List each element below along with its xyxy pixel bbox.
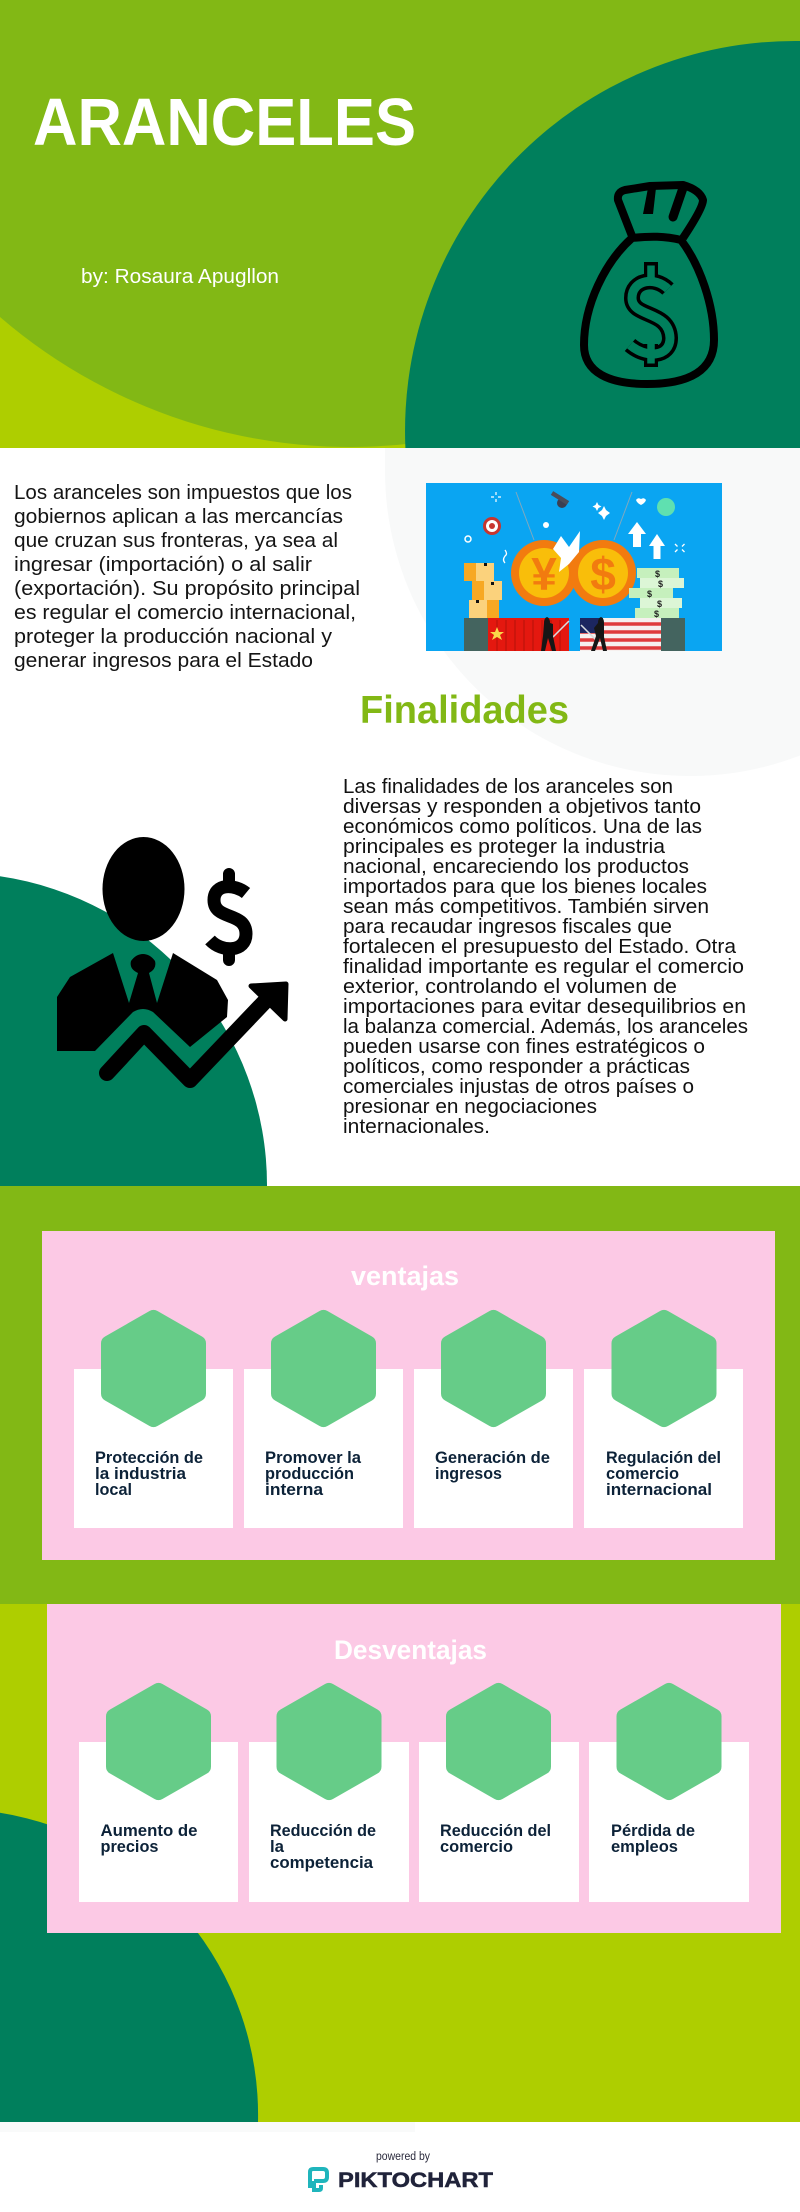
card: competencia: la bbox=[270, 1838, 285, 1856]
text block: finalidades paragraph: importados para que los bienes locales bbox=[343, 875, 707, 898]
text block: introduction: que cruzan sus fronteras, ya sea al bbox=[14, 530, 338, 552]
card: proteccion bbox=[74, 1318, 233, 1528]
card: competencia bbox=[249, 1691, 409, 1902]
text block: finalidades paragraph bbox=[343, 775, 748, 1138]
icon: money bag bbox=[584, 185, 714, 384]
illustration: trade war: $ bbox=[654, 609, 659, 619]
card: empleos: Pérdida de bbox=[611, 1822, 695, 1840]
text block: finalidades paragraph: económicos como políticos. Una de las bbox=[343, 815, 702, 838]
card: aumento: precios bbox=[100, 1838, 158, 1856]
text: piktochart wordmark: PIKTOCHART bbox=[338, 2169, 493, 2192]
author byline: by: Rosaura Apugllon bbox=[81, 266, 279, 288]
text block: finalidades paragraph: comerciales injustas de otros países o bbox=[343, 1075, 694, 1098]
text block: introduction bbox=[14, 482, 360, 672]
panel: finalidades background circle bbox=[0, 876, 267, 1186]
card: competencia: competencia bbox=[270, 1854, 374, 1872]
text block: finalidades paragraph: principales es proteger la industria bbox=[343, 835, 666, 858]
card: proteccion: local bbox=[95, 1481, 132, 1499]
illustration: trade war: $ bbox=[647, 589, 652, 599]
card: generacion: Generación de bbox=[435, 1449, 550, 1467]
card: aumento: Aumento de bbox=[100, 1822, 198, 1840]
card: regulacion: Regulación del bbox=[606, 1449, 721, 1467]
text block: introduction: gobiernos aplican a las mercancías bbox=[14, 506, 343, 528]
icon: piktochart logo bbox=[310, 2169, 327, 2190]
card: regulacion: internacional bbox=[606, 1481, 712, 1499]
card: proteccion: la industria bbox=[95, 1465, 187, 1483]
text block: introduction: (exportación). Su propósito principal bbox=[14, 578, 360, 600]
text block: finalidades paragraph: pueden usarse con fines estratégicos o bbox=[343, 1035, 705, 1058]
card: proteccion: Protección de bbox=[95, 1449, 203, 1467]
card: promover bbox=[244, 1318, 403, 1528]
card: comercio: Reducción del bbox=[440, 1822, 551, 1840]
text block: introduction: proteger la producción nacional y bbox=[14, 626, 332, 648]
text block: introduction: es regular el comercio internacional, bbox=[14, 602, 356, 624]
text block: finalidades paragraph: Las finalidades de los aranceles son bbox=[343, 775, 673, 798]
card: competencia: Reducción de bbox=[270, 1822, 376, 1840]
heading: Finalidades: Finalidades bbox=[360, 689, 569, 732]
card: promover: producción bbox=[265, 1465, 354, 1483]
heading: desventajas: Desventajas bbox=[334, 1635, 487, 1665]
card: comercio bbox=[419, 1691, 579, 1902]
text block: finalidades paragraph: internacionales. bbox=[343, 1115, 490, 1138]
text block: finalidades paragraph: nacional, encareciendo los productos bbox=[343, 855, 689, 878]
text block: finalidades paragraph: diversas y responden a objetivos tanto bbox=[343, 795, 701, 818]
panel: desventajas bbox=[47, 1604, 781, 1933]
text block: finalidades paragraph: exterior, controlando el volumen de bbox=[343, 975, 677, 998]
panel: hero header bbox=[0, 0, 800, 448]
text: powered by: powered by bbox=[376, 2151, 430, 2163]
text block: finalidades paragraph: presionar en negociaciones bbox=[343, 1095, 597, 1118]
text block: finalidades paragraph: para recaudar ingresos fiscales que bbox=[343, 915, 672, 938]
panel: lime section background bbox=[0, 1604, 800, 2122]
text block: finalidades paragraph: políticos, como responder a prácticas bbox=[343, 1055, 690, 1078]
text block: finalidades paragraph: fortalecen el presupuesto del Estado. Otra bbox=[343, 935, 737, 958]
illustration: trade war: $ bbox=[655, 569, 660, 579]
card: comercio: comercio bbox=[440, 1838, 513, 1856]
card: empleos: empleos bbox=[611, 1838, 678, 1856]
illustration: trade war bbox=[426, 483, 722, 651]
text block: finalidades paragraph: finalidad importante es regular el comercio bbox=[343, 955, 744, 978]
card: aumento bbox=[79, 1691, 238, 1902]
panel: green section background bbox=[0, 1186, 800, 1604]
card: generacion: ingresos bbox=[435, 1465, 502, 1483]
text block: finalidades paragraph: la balanza comercial. Además, los aranceles bbox=[343, 1015, 748, 1038]
heading: ventajas: ventajas bbox=[351, 1261, 459, 1291]
panel: footer bbox=[0, 2122, 800, 2212]
text block: introduction: generar ingresos para el Estado bbox=[14, 650, 313, 672]
text block: finalidades paragraph: importaciones para evitar desequilibrios en bbox=[343, 995, 746, 1018]
illustration: trade war: $ bbox=[657, 599, 662, 609]
illustration: trade war: $ bbox=[590, 548, 616, 600]
text block: introduction: Los aranceles son impuestos que los bbox=[14, 482, 352, 504]
card: promover: interna bbox=[265, 1481, 324, 1499]
card: empleos bbox=[589, 1691, 749, 1902]
card: regulacion: comercio bbox=[606, 1465, 679, 1483]
text block: finalidades paragraph: sean más competitivos. También sirven bbox=[343, 895, 709, 918]
icon: businessman with rising chart bbox=[57, 837, 286, 1080]
illustration: trade war: ¥ bbox=[531, 548, 557, 600]
title: ARANCELES bbox=[33, 85, 416, 160]
panel: ventajas bbox=[42, 1231, 775, 1560]
text block: introduction: ingresar (importación) o al salir bbox=[14, 554, 312, 576]
card: promover: Promover la bbox=[265, 1449, 362, 1467]
illustration: trade war: $ bbox=[658, 579, 663, 589]
card: generacion bbox=[414, 1318, 573, 1528]
card: regulacion bbox=[584, 1318, 743, 1528]
